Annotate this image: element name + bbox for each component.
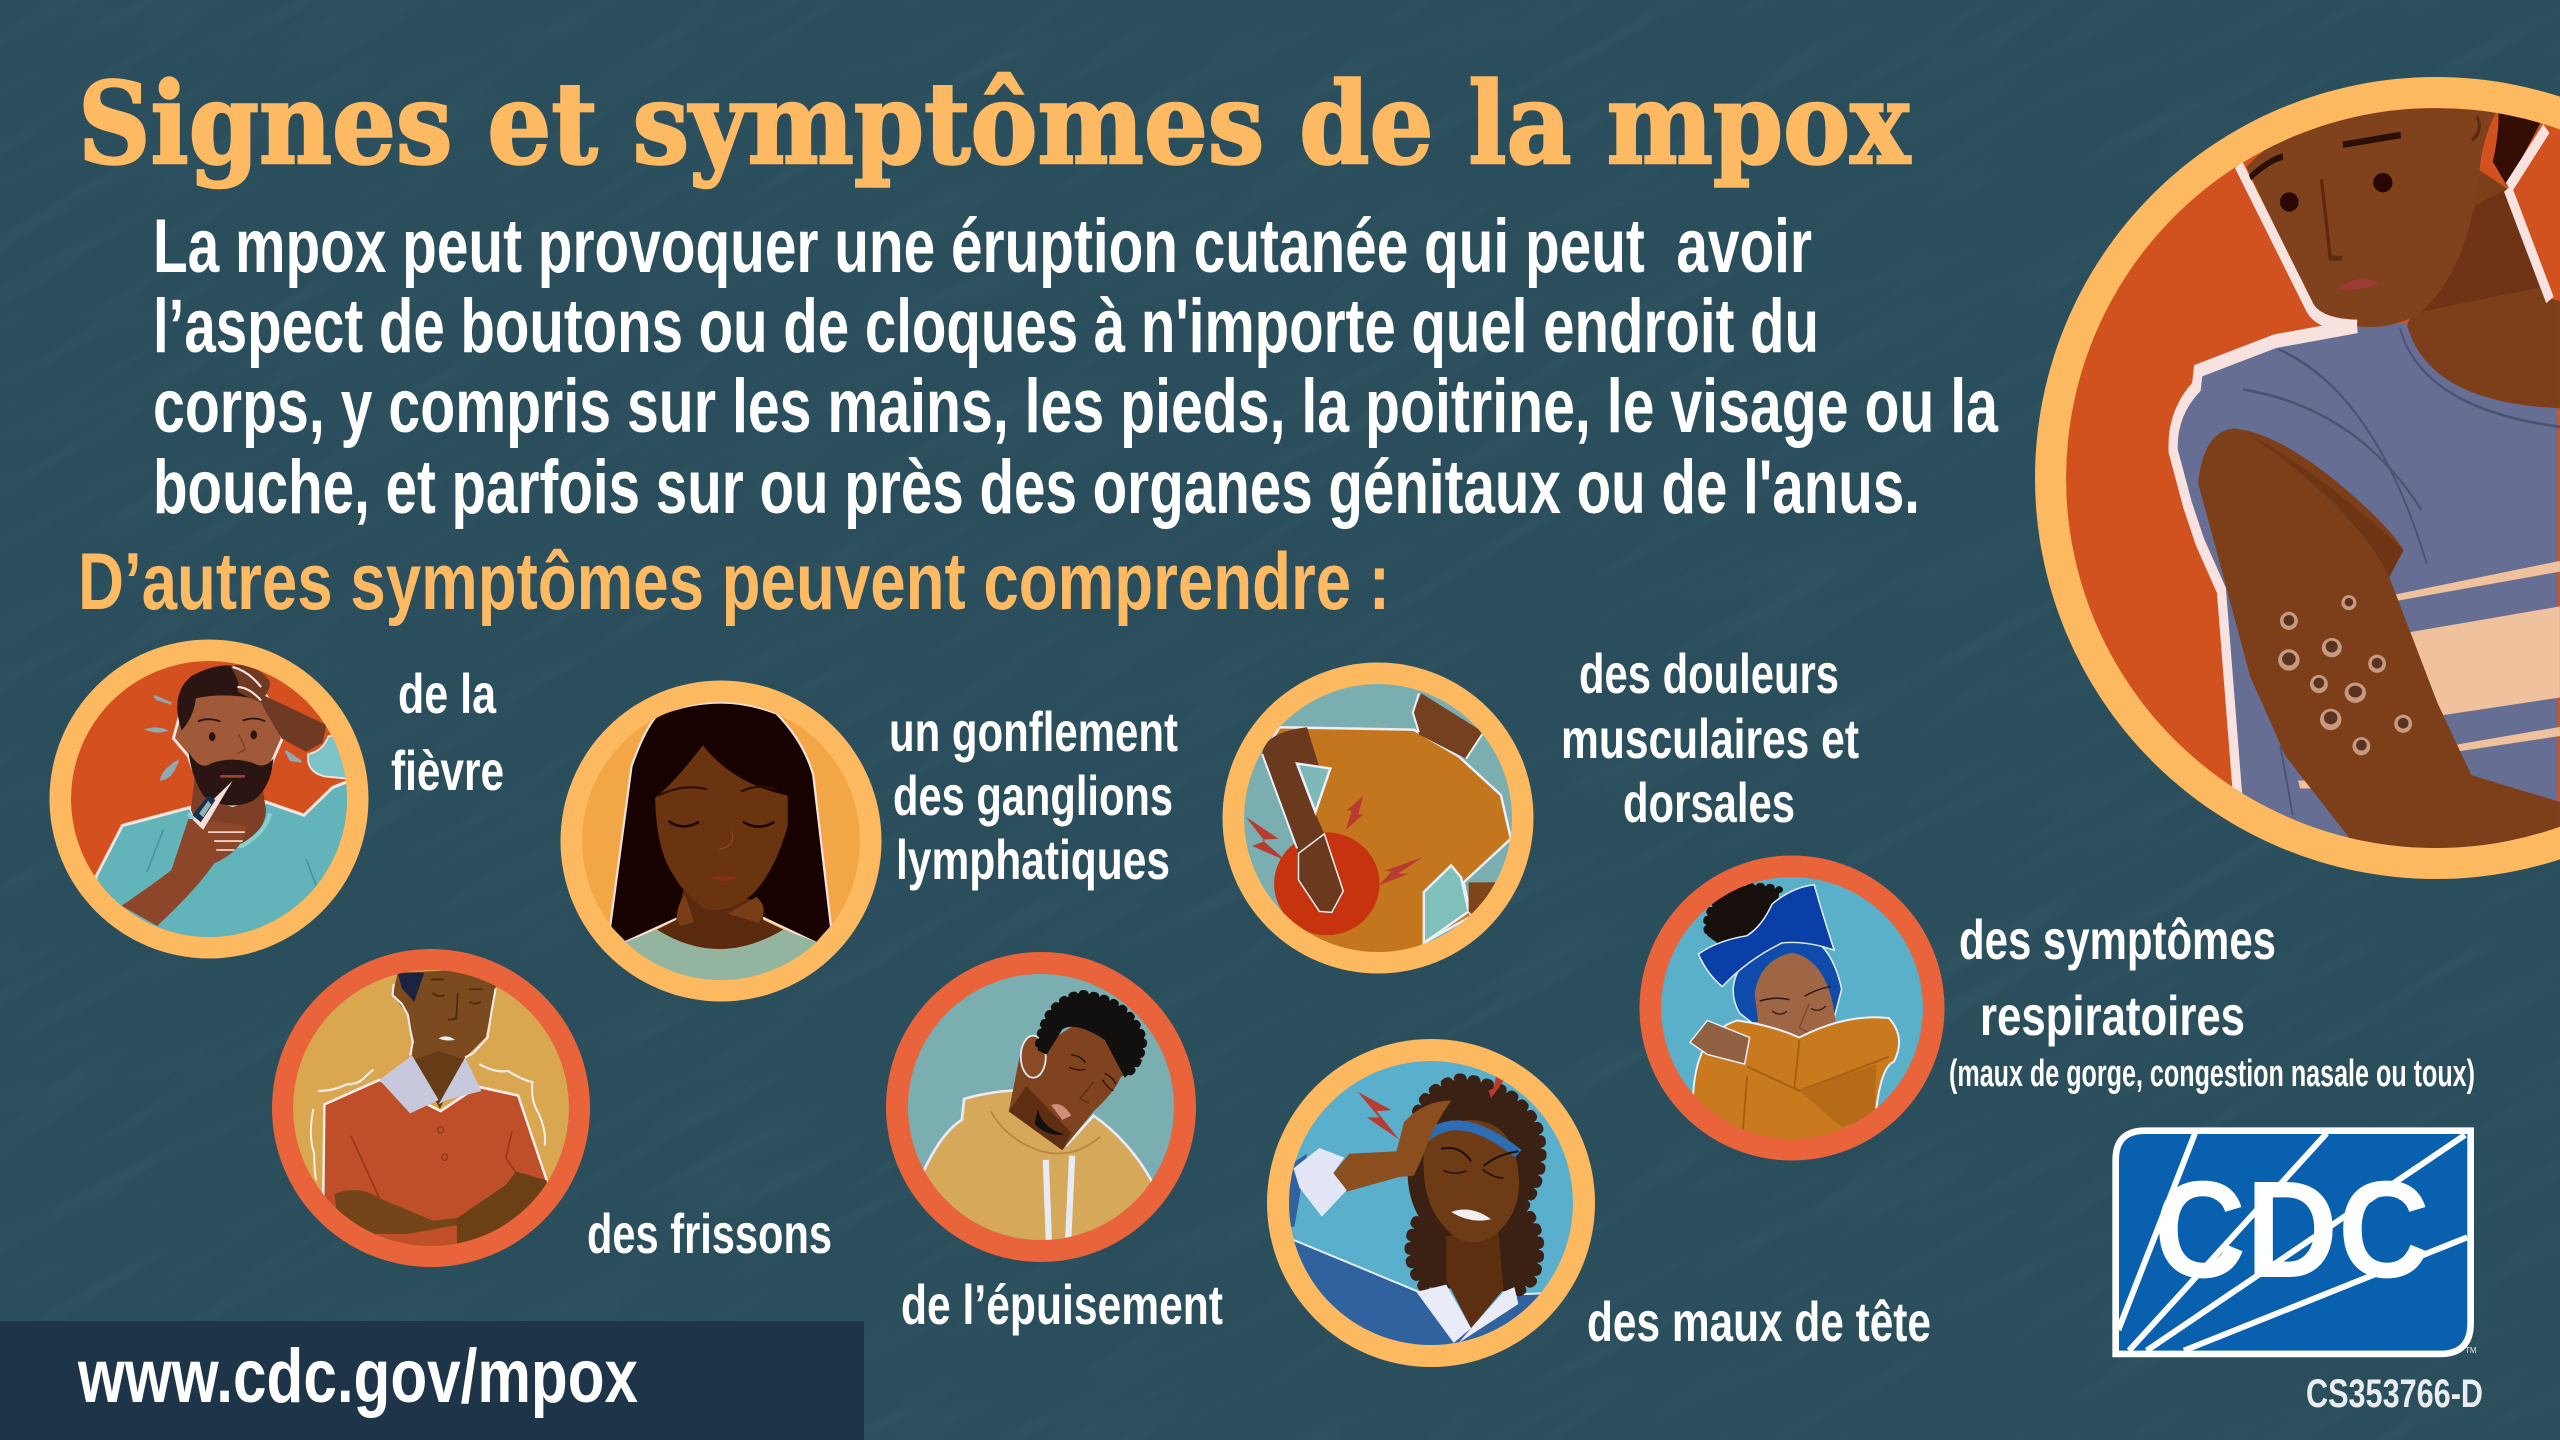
- label: swollen lymph nodes: lymphatiques: [896, 828, 1170, 891]
- main illustration: person with rash on arm: [2035, 77, 2560, 879]
- label: respiratory symptoms: respiratoires: [1980, 984, 2245, 1047]
- label: fever: [391, 662, 504, 802]
- CDC logo: [2116, 1131, 2477, 1355]
- symptom: swollen lymph nodes illustration: [560, 680, 882, 1002]
- symptom: muscle and back pain illustration: [1222, 662, 1534, 974]
- symptom: headache illustration: [1267, 1039, 1595, 1377]
- label: muscle and back pain: dorsales: [1623, 771, 1795, 834]
- label: exhaustion: de l’épuisement: [901, 1273, 1223, 1336]
- url bar: [0, 1321, 864, 1440]
- shirt: [2173, 312, 2557, 864]
- title: Signes et symptômes de la mpox: [78, 59, 1911, 190]
- face: [2246, 108, 2498, 327]
- label: respiratory symptoms: [1949, 908, 2475, 1095]
- intro text block: corps, y compris sur les mains, les pieds, la poitrine, le visage ou la: [153, 364, 1999, 449]
- CDC logo: TM: [2465, 1346, 2477, 1355]
- label: swollen lymph nodes: un gonflement: [889, 700, 1178, 763]
- url bar: www.cdc.gov/mpox: [77, 1334, 638, 1419]
- CDC logo: CDC: [2154, 1153, 2430, 1307]
- label: fever: fièvre: [391, 739, 504, 802]
- rash: [2278, 595, 2412, 755]
- neck: [2407, 167, 2560, 408]
- label: muscle and back pain: musculaires et: [1561, 707, 1859, 770]
- label: muscle and back pain: [1561, 642, 1859, 834]
- intro text block: [153, 204, 1999, 530]
- symptom: chills illustration: [272, 949, 590, 1279]
- symptom: respiratory illustration: [1640, 856, 1944, 1160]
- label: fever: de la: [398, 662, 497, 725]
- label: headache: des maux de tête: [1587, 1290, 1931, 1353]
- skin outlines: [2239, 129, 2550, 326]
- label: chills: des frissons: [587, 1202, 832, 1265]
- label: muscle and back pain: des douleurs: [1579, 642, 1839, 705]
- symptom: exhaustion illustration: [886, 952, 1196, 1262]
- publication code: CS353766-D: [2306, 1372, 2483, 1416]
- label: respiratory symptoms: des symptômes: [1959, 908, 2276, 971]
- symptom: fever illustration: [50, 640, 368, 958]
- subheading: D’autres symptômes peuvent comprendre :: [78, 537, 1390, 627]
- intro text block: La mpox peut provoquer une éruption cutanée qui peut avoir: [153, 204, 1812, 289]
- label: swollen lymph nodes: des ganglions: [893, 764, 1173, 827]
- arm: [2198, 429, 2560, 864]
- label: swollen lymph nodes: [889, 700, 1178, 891]
- intro text block: bouche, et parfois sur ou près des organes génitaux ou de l'anus.: [153, 445, 1920, 530]
- intro text block: l’aspect de boutons ou de cloques à n'importe quel endroit du: [153, 284, 1819, 369]
- shirt stripes: [2289, 561, 2560, 789]
